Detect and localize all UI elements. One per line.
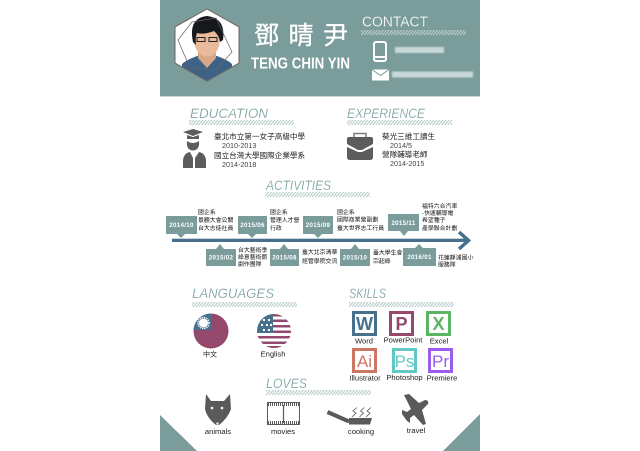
label: travel: travel: [407, 426, 426, 435]
timeline: 2016/01: 服務隊: [438, 260, 456, 268]
timeline: 2015/11: [388, 202, 457, 236]
blurred email: [392, 72, 473, 78]
text: experience: 葵光三維工讀生: [382, 131, 436, 141]
timeline: 2015/02: 台大藝術季: [238, 246, 268, 254]
icon: film: [268, 402, 300, 424]
text: experience: [382, 131, 436, 168]
timeline: 2014/10: 台大志徒社員: [198, 224, 233, 232]
timeline: 2015/06: 2015/06: [240, 222, 265, 229]
text: education: 臺北市立第一女子高級中學: [214, 131, 306, 141]
text: experience: 營隊輔導老師: [382, 149, 428, 159]
contact heading: CONTACT: [362, 14, 428, 30]
heading: skills: [349, 285, 454, 307]
timeline: 2014/10: 景觀大會公關: [198, 216, 233, 224]
corner triangles: [160, 414, 480, 451]
timeline: 2015/11: 希望種子: [422, 216, 446, 224]
heading: experience: EXPERIENCE: [347, 105, 426, 121]
heading: experience: [347, 105, 452, 125]
icon: airplane: [402, 394, 428, 425]
skill: Word: Word: [355, 336, 373, 346]
heading: activities: ACTIVITIES: [265, 177, 332, 193]
timeline: 2015/06: 行政: [270, 224, 282, 232]
name: 鄧 晴 尹: [254, 22, 348, 50]
timeline: 2015/06: 國企系: [270, 208, 288, 216]
skill: PowerPoint: PowerPoint: [384, 336, 423, 344]
english name: TENG CHIN YIN: [251, 56, 350, 72]
label: English: English: [261, 350, 285, 358]
timeline: 2016/01: [403, 244, 473, 268]
timeline: 2015/10: [340, 244, 403, 266]
timeline: 2015/09: 國企系: [337, 208, 355, 216]
skill: Photoshop: Ps: [395, 352, 414, 371]
timeline: 2016/01: 2016/01: [407, 254, 432, 261]
label: movies: movies: [271, 427, 295, 436]
heading: languages: [192, 285, 297, 307]
heading: education: [189, 105, 294, 125]
text: education: 國立台灣大學國際企業學系: [214, 150, 306, 160]
timeline: 2015/10: 2015/10: [343, 254, 367, 262]
timeline: 2015/10: 臺大學生會: [373, 248, 403, 256]
flag: Taiwan: [194, 314, 228, 348]
heading: loves: [266, 375, 371, 395]
skill: Premiere: Premiere: [427, 374, 457, 382]
timeline: 2015/06: [238, 208, 300, 238]
skill: Excel: X: [432, 314, 445, 334]
timeline: 2015/08: 經管學院交流: [302, 257, 337, 265]
heading: skills: SKILLS: [349, 285, 387, 301]
timeline: 2015/08: 2015/08: [272, 254, 297, 262]
skill: Illustrator: [349, 350, 381, 382]
timeline: 2015/06: 管理人才營: [270, 216, 300, 224]
skill: PowerPoint: [384, 312, 423, 344]
heading: education: EDUCATION: [190, 105, 269, 121]
timeline: 2015/08: 臺大北京清華: [302, 248, 337, 256]
timeline arrow: [172, 232, 468, 249]
timeline: 2014/10: 國企系: [198, 208, 216, 216]
skill: Premiere: [427, 350, 457, 382]
text: education: 2010-2013: [222, 141, 256, 150]
skill: Photoshop: Photoshop: [386, 373, 423, 382]
icon: envelope: [372, 70, 389, 80]
heading: languages: LANGUAGES: [192, 285, 275, 301]
skill: Photoshop: [386, 350, 423, 382]
skill: Illustrator: Ai: [357, 352, 372, 371]
skill: Excel: [428, 312, 450, 346]
label: Chinese: 中文: [203, 350, 217, 358]
timeline: 2015/09: 臺大世界志工行員: [337, 224, 384, 232]
timeline: 2015/11: 2015/11: [391, 220, 416, 227]
timeline: 2015/11: 福特六合汽車: [422, 202, 457, 210]
timeline: 2015/10: 宗起綠: [373, 257, 391, 265]
skill: Word: [354, 312, 376, 346]
text: education: 2014-2018: [222, 160, 256, 169]
timeline: 2014/10: 2014/10: [169, 222, 194, 229]
timeline: 2015/11: 產學聯合計劃: [422, 224, 457, 232]
skill: Premiere: Pr: [432, 352, 449, 371]
icon: briefcase: [347, 134, 373, 160]
timeline: 2014/10: [166, 208, 233, 238]
skill: Word: W: [356, 314, 373, 334]
text: education: [214, 131, 306, 169]
timeline: 2015/02: 綠意藝術節: [238, 253, 268, 261]
timeline: 2016/01: 花蓮靜浦國小: [438, 254, 473, 262]
text: experience: 2014-2015: [390, 159, 424, 168]
skill: Excel: Excel: [430, 336, 449, 346]
flag: USA: [257, 314, 291, 348]
icon: phone: [374, 42, 386, 61]
icon: graduate: [183, 129, 206, 168]
label: animals: animals: [205, 427, 231, 436]
icon: frying pan: [328, 408, 372, 424]
label: cooking: cooking: [348, 427, 374, 436]
heading: loves: LOVES: [266, 375, 308, 391]
timeline: 2015/09: 2015/09: [306, 222, 330, 229]
timeline: 2015/09: 國際商業營副劃: [337, 216, 378, 224]
timeline: 2015/02: 劇作團隊: [238, 260, 262, 268]
skill: PowerPoint: P: [395, 314, 408, 334]
timeline: 2015/08: [270, 244, 337, 266]
timeline: 2015/02: 2015/02: [209, 254, 233, 262]
header band: [160, 0, 480, 97]
timeline: 2015/09: [303, 208, 384, 238]
timeline: 2015/11: -快速輔導電: [422, 209, 454, 217]
icon: fox: [205, 394, 231, 425]
blurred phone number: [395, 47, 444, 53]
text: experience: 2014/5: [390, 141, 412, 150]
profile photo in hexagon: [175, 9, 239, 81]
skill: Illustrator: Illustrator: [349, 374, 381, 382]
timeline: 2015/02: [206, 244, 268, 268]
heading: activities: [265, 177, 370, 197]
